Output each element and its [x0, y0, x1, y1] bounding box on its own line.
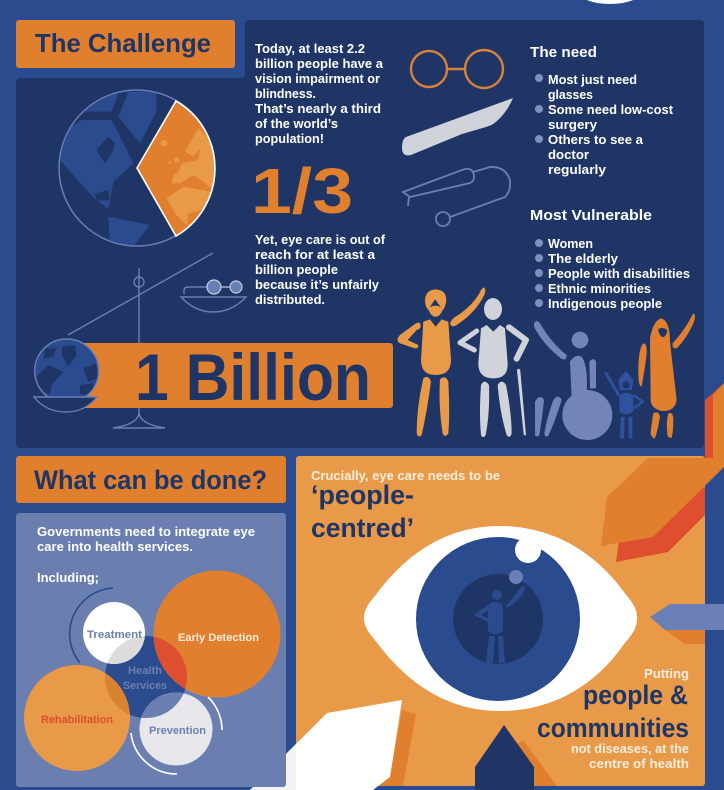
- list: most vulnerable: Ethnic minorities: [548, 282, 651, 296]
- text: vision impairment statistic: blindness.: [255, 87, 316, 101]
- arrow: dark house shape bottom: [475, 725, 557, 790]
- icon: glasses: [411, 50, 503, 88]
- panel: people-centred: [296, 456, 705, 786]
- list: the need: regularly: [548, 163, 606, 177]
- heading: people-centred: centred’: [311, 513, 414, 543]
- text: vision impairment statistic: That’s nearly a third: [255, 102, 381, 116]
- text: eye care out of reach: Yet, eye care is out of: [255, 233, 386, 247]
- arrow: red upper band: [650, 383, 724, 470]
- text: eye care out of reach: distributed.: [255, 293, 325, 307]
- list: most vulnerable: Indigenous people: [548, 297, 662, 311]
- text: vision impairment statistic: vision impairment or: [255, 72, 380, 86]
- list: the need: Others to see a: [548, 133, 644, 147]
- text: putting people and communities: communities: [537, 713, 689, 743]
- scale with glasses and globe: [34, 253, 393, 428]
- text: vision impairment statistic: billion people have a: [255, 57, 384, 71]
- list: most vulnerable: The elderly: [548, 252, 618, 266]
- heading: The Challenge: The Challenge: [35, 28, 211, 58]
- text: putting people and communities: Putting: [644, 667, 689, 681]
- venn diagram: Health: [128, 665, 162, 677]
- list: most vulnerable: Women: [548, 237, 593, 251]
- text: crucially: Crucially, eye care needs to be: [311, 469, 500, 483]
- text: eye care out of reach: reach for at least a: [255, 248, 376, 262]
- text: governments: Including;: [37, 571, 99, 585]
- figure: child: [606, 371, 643, 438]
- heading: What can be done?: What can be done?: [34, 465, 267, 495]
- text: putting people and communities: people &: [583, 680, 688, 710]
- figure: elderly man with cane: [460, 298, 526, 437]
- list: the need: [535, 73, 674, 177]
- list: the need: surgery: [548, 118, 597, 132]
- icon: scalpel: [402, 98, 513, 155]
- heading: Most Vulnerable: Most Vulnerable: [530, 207, 652, 224]
- list: most vulnerable: [535, 237, 690, 311]
- arrow: orange and red lower: [601, 383, 724, 562]
- text: eye care out of reach: because it’s unfairly: [255, 278, 379, 292]
- venn diagram: [24, 570, 280, 774]
- text: governments: Governments need to integrate eye: [37, 525, 255, 539]
- figure in pupil: [474, 585, 525, 663]
- panel: dark challenge background: [16, 20, 704, 448]
- text: eye care out of reach: billion people: [255, 263, 338, 277]
- venn diagram: Treatment: [87, 629, 142, 641]
- text: putting people and communities: not diseases, at the: [571, 742, 689, 756]
- text: putting people and communities: [537, 667, 689, 771]
- text: vision impairment statistic: [255, 42, 384, 146]
- venn diagram: Prevention: [149, 725, 206, 737]
- list: the need: Most just need: [548, 73, 637, 87]
- arrow: blue from right: [650, 604, 724, 644]
- text: vision impairment statistic: population!: [255, 132, 324, 146]
- icon: stethoscope: [403, 167, 510, 226]
- list: the need: doctor: [548, 148, 589, 162]
- big number: 1/3: 1/3: [251, 155, 353, 227]
- heading: The need: The need: [530, 44, 597, 61]
- venn diagram: Services: [123, 680, 167, 692]
- list: the need: Some need low-cost: [548, 103, 674, 117]
- panel: what can be done: [16, 513, 286, 787]
- list: the need: glasses: [548, 88, 593, 102]
- venn diagram: Rehabilitation: [41, 714, 113, 726]
- heading: What can be done?: [16, 456, 286, 503]
- text: governments: care into health services.: [37, 540, 193, 554]
- arrow: white lower left: [250, 700, 416, 790]
- figure: man with turban: [397, 287, 485, 436]
- list: most vulnerable: People with disabilities: [548, 267, 690, 281]
- text: vision impairment statistic: of the world’s: [255, 117, 338, 131]
- 1 Billion bar: 1 Billion: [135, 340, 371, 414]
- heading: The Challenge: [16, 20, 235, 68]
- top white shape: [579, 0, 641, 4]
- figure: woman in robe: [638, 313, 695, 438]
- text: putting people and communities: centre of health: [589, 757, 689, 771]
- text: governments: [37, 525, 255, 585]
- text: eye care out of reach: [255, 233, 386, 307]
- globe with one third wedge: [58, 90, 217, 248]
- figure: person in wheelchair: [534, 321, 612, 440]
- eye illustration: [364, 526, 637, 711]
- text: vision impairment statistic: Today, at least 2.2: [255, 42, 365, 56]
- heading: people-centred: ‘people-: [311, 480, 414, 510]
- heading: people-centred: [311, 480, 414, 543]
- venn diagram: Early Detection: [178, 632, 259, 644]
